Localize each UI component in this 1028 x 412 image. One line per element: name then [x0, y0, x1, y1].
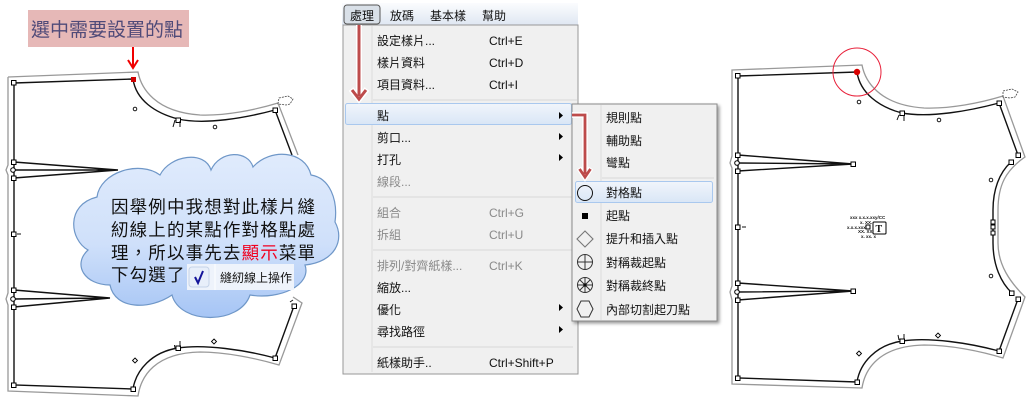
selected red point — [131, 77, 136, 82]
tiny centre label: T — [876, 224, 882, 235]
tiny centre label: XX. XX. x — [858, 229, 878, 234]
menu panel: Ctrl+E — [489, 34, 523, 48]
icon: square — [582, 213, 588, 219]
icon: star circle — [577, 277, 593, 293]
tiny centre label — [847, 215, 886, 239]
left pattern piece — [6, 72, 302, 396]
right pattern piece — [730, 48, 1025, 388]
menu panel: 線段... — [377, 174, 411, 189]
menu bar: 幫助 — [482, 8, 506, 23]
arrow: red down to point — [128, 47, 138, 68]
submenu: 輔助點 — [606, 133, 642, 148]
menu panel: 點 — [377, 108, 389, 123]
menu panel: Ctrl+Shift+P — [489, 356, 554, 370]
menu panel: 優化 — [377, 302, 401, 317]
submenu: 對格點 — [606, 185, 642, 200]
menu bar: 基本樣 — [430, 8, 466, 23]
menu panel: 項目資料... — [377, 78, 435, 92]
menu panel: 紙樣助手.. — [377, 355, 432, 370]
menu panel: 排列/對齊紙樣... — [377, 258, 462, 273]
menu panel — [343, 25, 578, 374]
checkbox menu item — [187, 264, 294, 290]
title label: 選中需要設置的點 — [31, 19, 183, 41]
menu panel: 拆組 — [377, 227, 401, 242]
submenu — [572, 104, 717, 321]
arrow: to submenu item — [572, 115, 591, 177]
menu bar: 放碼 — [390, 8, 414, 23]
checkbox menu item: 縫紉線上操作 — [220, 270, 292, 285]
title label — [28, 10, 189, 47]
submenu: 提升和插入點 — [606, 231, 678, 246]
icon: hexagon — [577, 301, 593, 317]
menu panel: Ctrl+G — [489, 206, 524, 220]
callout text: 理，所以事先去顯示菜單 — [111, 243, 316, 263]
menu panel: 樣片資料 — [377, 55, 425, 70]
menu panel: Ctrl+K — [489, 259, 523, 273]
red circle highlight — [833, 48, 881, 96]
tiny centre label: x. xx. x — [861, 234, 877, 239]
menu panel: 組合 — [377, 205, 401, 220]
cloud callout — [74, 154, 339, 345]
submenu: 內部切割起刀點 — [606, 302, 690, 317]
submenu: 對稱裁終點 — [606, 278, 666, 293]
menu bar: 處理 — [350, 9, 374, 23]
submenu: 對稱裁起點 — [606, 255, 666, 270]
menu panel: Ctrl+D — [489, 56, 524, 70]
tiny centre label: x.x.x.xxx — [847, 225, 866, 230]
menu panel: 設定樣片... — [377, 33, 435, 48]
callout text: 因舉例中我想對此樣片縫 — [111, 197, 316, 217]
submenu: 彎點 — [606, 155, 630, 170]
menu panel: 打孔 — [377, 153, 401, 167]
icon: cross circle — [577, 254, 593, 270]
main menu window — [342, 3, 578, 374]
tiny centre label: xxx x.x.x.xxy/CC — [850, 215, 886, 220]
icon: circle — [578, 186, 592, 200]
menu bar — [342, 3, 578, 25]
submenu: 起點 — [606, 208, 630, 223]
menu panel: Ctrl+U — [489, 228, 523, 242]
menu panel: 剪口... — [377, 130, 411, 145]
menu panel: 尋找路徑 — [377, 324, 425, 339]
callout text: 紉線上的某點作對格點處 — [111, 220, 316, 240]
menu panel: Ctrl+I — [489, 78, 518, 92]
submenu: 規則點 — [606, 110, 642, 125]
icon: diamond — [577, 231, 593, 247]
tiny centre label: x. XX. x — [860, 220, 877, 225]
callout text: 下勾選了 — [111, 265, 186, 285]
arrow: down from menu title — [351, 25, 367, 99]
red selected point — [854, 69, 860, 75]
menu panel: 縮放... — [377, 280, 411, 295]
callout text — [111, 197, 316, 285]
